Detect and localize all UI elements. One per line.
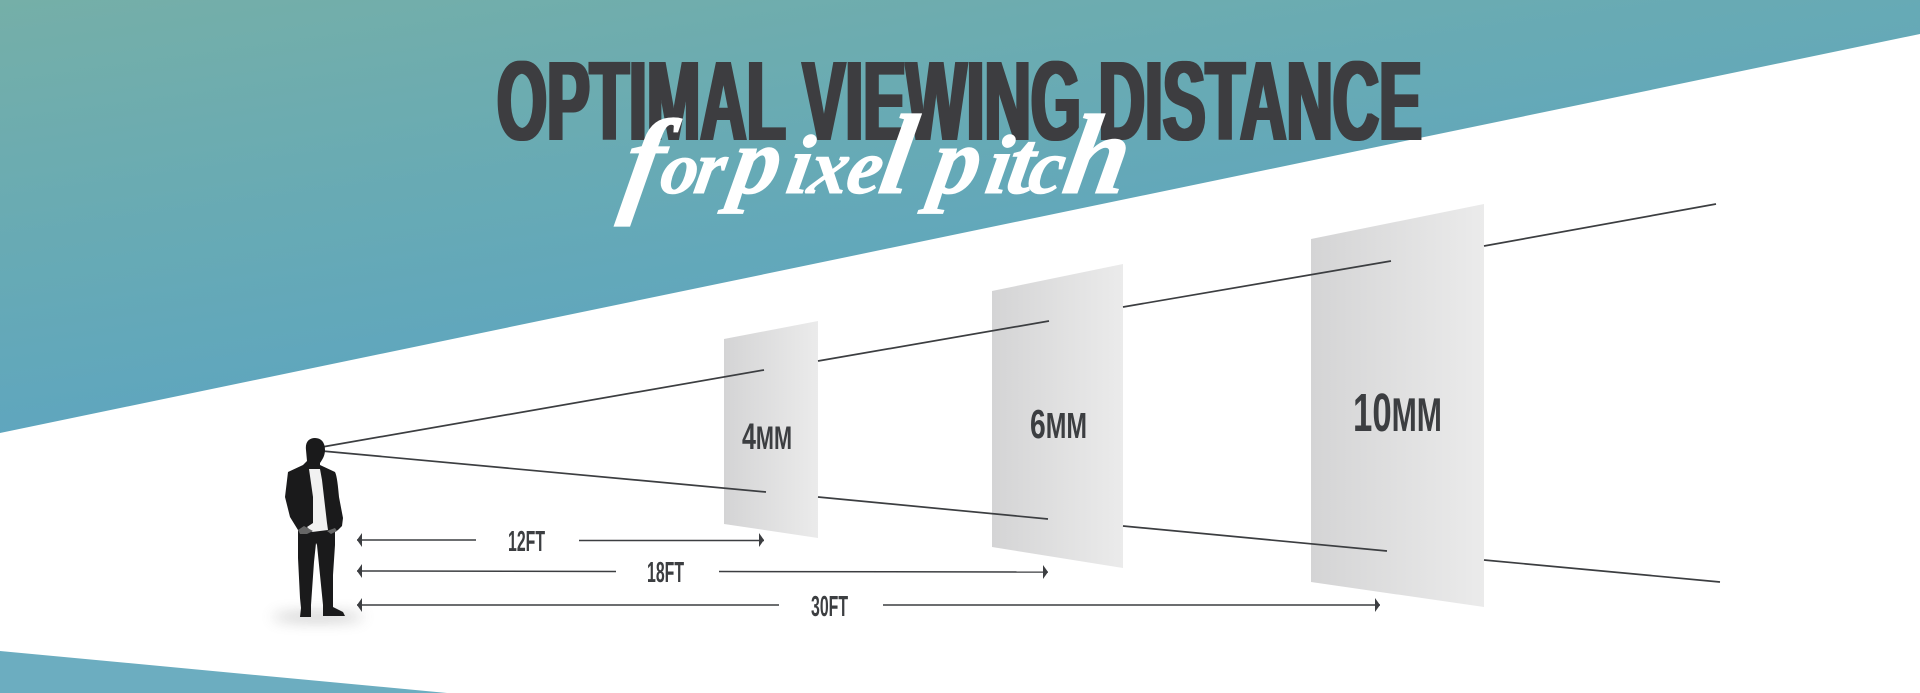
ground shadow — [272, 613, 364, 621]
background: upper teal diagonal band — [0, 0, 1920, 433]
subtitle script: p — [717, 108, 791, 214]
subtitle script: o — [655, 128, 706, 210]
body — [285, 438, 345, 617]
subtitle script: e — [841, 125, 891, 211]
label: 30ft: 30FT — [811, 591, 848, 623]
subtitle script: r — [689, 126, 735, 210]
dimension: 18ft — [357, 557, 1048, 589]
icon: standing person silhouette — [272, 438, 364, 621]
subtitle script: x — [802, 125, 857, 211]
subtitle script: p — [917, 108, 991, 214]
subtitle script: c — [1023, 125, 1073, 211]
subtitle script: i — [781, 120, 821, 212]
subtitle script: i — [980, 120, 1020, 212]
dimension: 12ft — [357, 526, 764, 558]
hands — [298, 526, 337, 534]
label: 10mm: 10MM — [1353, 383, 1442, 443]
subtitle script: l — [872, 92, 926, 218]
background: lower left teal wedge — [0, 651, 447, 693]
dimension: 30ft — [357, 591, 1380, 623]
subtitle script: f — [614, 96, 687, 227]
label: 12ft: 12FT — [508, 526, 545, 558]
label: 18ft: 18FT — [647, 557, 684, 589]
white t-shirt — [307, 469, 328, 532]
sight lines from viewer through screens — [322, 204, 1720, 582]
label: 4mm: 4MM — [742, 416, 792, 457]
label: 6mm: 6MM — [1030, 401, 1087, 447]
subtitle script: h — [1056, 92, 1141, 218]
panel: 10mm screen — [1311, 204, 1484, 607]
subtitle script: t — [1001, 113, 1046, 213]
panel: 6mm screen — [992, 264, 1123, 568]
panel: 4mm screen — [724, 321, 818, 538]
